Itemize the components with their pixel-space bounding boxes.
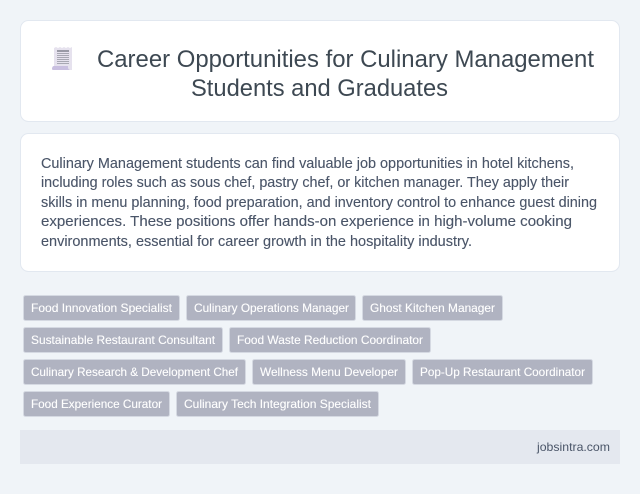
title: [97, 46, 594, 102]
title: Career Opportunities for Culinary Management: [97, 46, 594, 73]
tag: Culinary Operations Manager: Culinary Operations Manager: [194, 301, 349, 315]
panel: header: [20, 20, 620, 122]
tag: Wellness Menu Developer: Wellness Menu Developer: [260, 365, 398, 379]
text block: description: skills in menu planning, food preparation, and inventory control to enhance guest dining: [41, 195, 597, 211]
panel: description: [20, 134, 620, 272]
tag: Culinary Research & Development Chef: [24, 360, 246, 384]
text block: description: experiences. These positions offer hands-on experience in high-volume cooking: [41, 214, 572, 230]
tag: Culinary Research & Development Chef: Culinary Research & Development Chef: [31, 365, 239, 379]
tag: Ghost Kitchen Manager: [362, 296, 502, 320]
footer: [20, 430, 620, 464]
tag: Food Innovation Specialist: Food Innovation Specialist: [31, 301, 173, 315]
tag: Food Experience Curator: [24, 392, 170, 416]
tag: Food Waste Reduction Coordinator: [230, 328, 430, 352]
text block: description: environments, essential for career growth in the hospitality industry.: [41, 234, 472, 250]
text block: description: Culinary Management students can find valuable job opportunities in hotel kitchens,: [41, 156, 574, 172]
footer source text: jobsintra.com: [536, 440, 610, 454]
tag: Pop-Up Restaurant Coordinator: [412, 360, 592, 384]
tag: Culinary Operations Manager: [186, 296, 356, 320]
tags: [24, 296, 592, 416]
tag: Food Experience Curator: Food Experience Curator: [31, 397, 162, 411]
tag: Culinary Tech Integration Specialist: Culinary Tech Integration Specialist: [184, 397, 372, 411]
title: Students and Graduates: [191, 75, 448, 102]
tag: Ghost Kitchen Manager: Ghost Kitchen Manager: [370, 301, 495, 315]
tag: Culinary Tech Integration Specialist: [176, 392, 378, 416]
tag: Food Waste Reduction Coordinator: Food Waste Reduction Coordinator: [237, 333, 423, 347]
tag: Sustainable Restaurant Consultant: [24, 328, 222, 352]
text block: description: [41, 156, 597, 250]
tag: Wellness Menu Developer: [252, 360, 406, 384]
tag: Pop-Up Restaurant Coordinator: Pop-Up Restaurant Coordinator: [420, 365, 585, 379]
icon: menu document: [52, 47, 72, 70]
text block: description: including roles such as sous chef, pastry chef, or kitchen manager. They apply their: [41, 175, 569, 191]
tag: Sustainable Restaurant Consultant: Sustainable Restaurant Consultant: [31, 333, 216, 347]
tag: Food Innovation Specialist: [24, 296, 180, 320]
